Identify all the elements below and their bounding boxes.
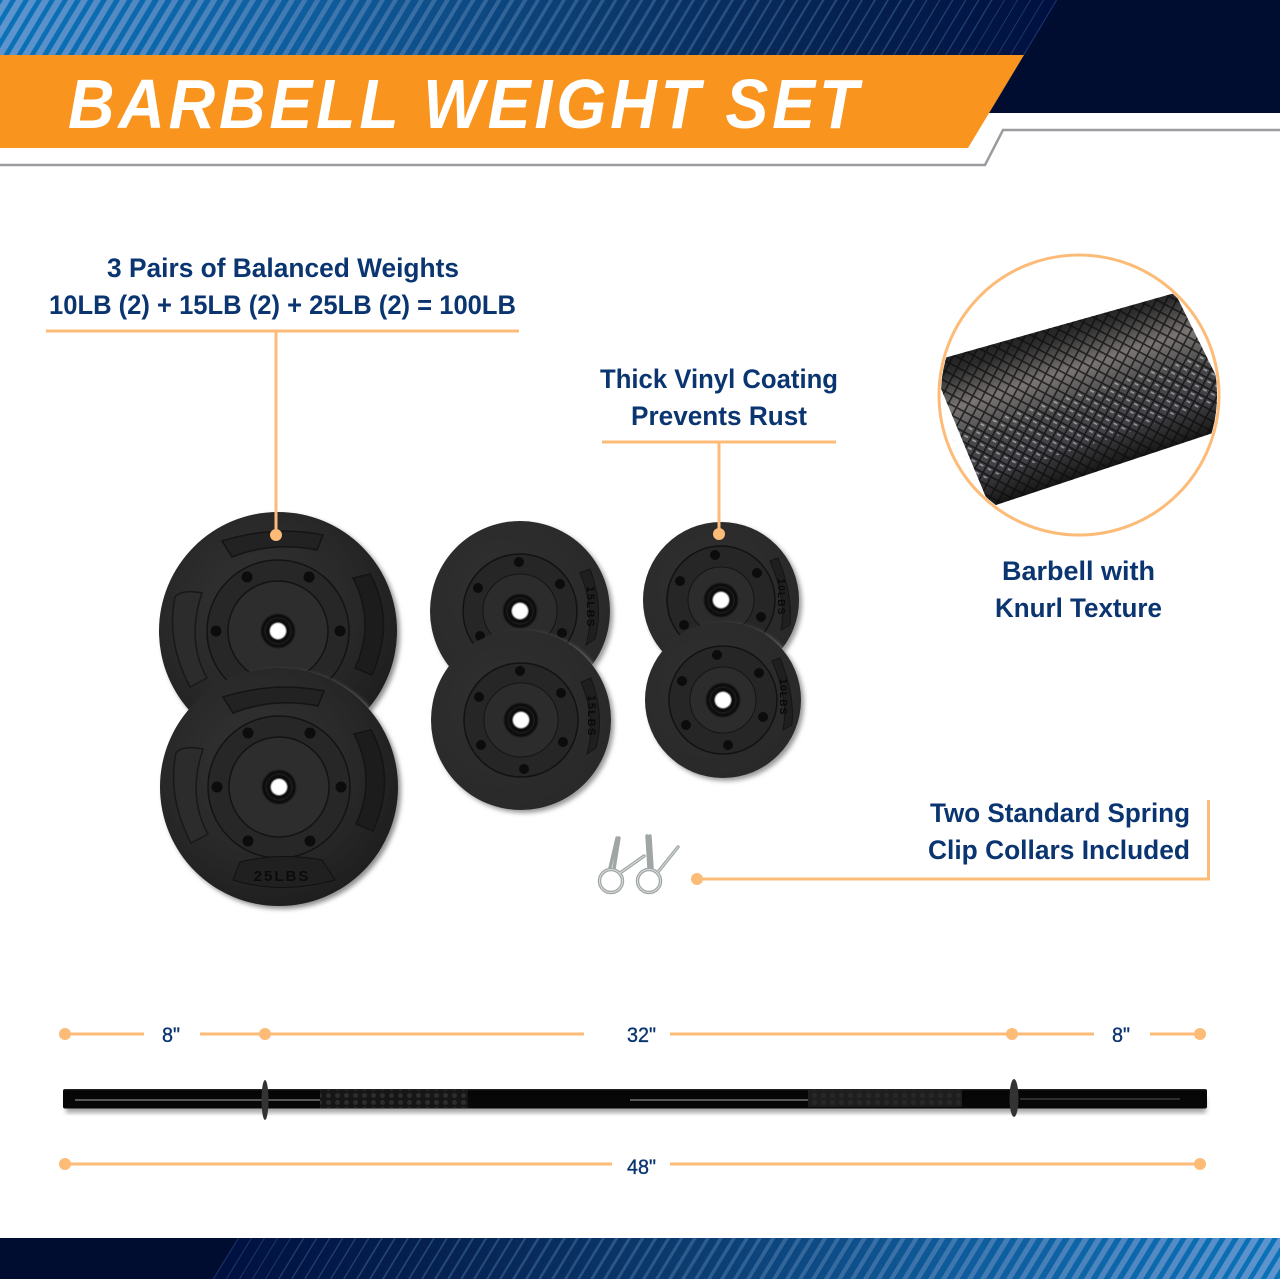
callout: knurl caption: Knurl Texture — [995, 593, 1162, 623]
dimension row: 8 / 32 / 8 inch: 8" — [162, 1024, 180, 1047]
plate: 15 lb back: 15LBS — [584, 586, 596, 628]
callout: vinyl coating — [600, 364, 838, 540]
callout: knurl caption: Barbell with — [1002, 556, 1155, 586]
25 lb plates — [159, 512, 401, 909]
dimension row: 48 inch — [59, 1156, 1206, 1179]
title: BARBELL WEIGHT SET — [68, 66, 863, 144]
plate: 15 lb front — [431, 630, 614, 813]
plate: 15 lb front: 15LBS — [585, 695, 597, 737]
15 lb plates — [430, 521, 614, 813]
barbell — [63, 1079, 1207, 1120]
callout: balanced weights — [46, 253, 519, 541]
callout: vinyl coating: Thick Vinyl Coating — [600, 364, 838, 394]
callout: spring clip collars — [691, 798, 1208, 885]
knurl texture detail circle — [930, 255, 1240, 535]
plate: 10 lb front: 10LBS — [777, 678, 788, 716]
title banner — [0, 55, 1024, 148]
header band — [0, 0, 1280, 113]
plate: 10 lb back: 10LBS — [775, 578, 786, 616]
dimension row: 48 inch: 48" — [627, 1156, 656, 1179]
callout: balanced weights: 3 Pairs of Balanced Weights — [107, 253, 459, 283]
plate: 10 lb front — [645, 622, 804, 781]
callout: balanced weights: 10LB (2) + 15LB (2) + 25LB (2) = 100LB — [49, 290, 516, 320]
dimension row: 8 / 32 / 8 inch — [59, 1024, 1206, 1047]
dimension row: 8 / 32 / 8 inch: 32" — [627, 1024, 656, 1047]
plate: 25 lb back — [159, 512, 400, 753]
10 lb plates — [643, 522, 804, 781]
dimension row: 8 / 32 / 8 inch: 8" — [1112, 1024, 1130, 1047]
callout: spring clip collars: Two Standard Spring — [930, 798, 1190, 828]
header outline — [0, 130, 1280, 165]
plate: 15 lb back — [430, 521, 613, 704]
callout: vinyl coating: Prevents Rust — [631, 401, 807, 431]
plate: 10 lb back — [643, 522, 802, 681]
footer band — [0, 1238, 1280, 1279]
callout: knurl caption — [995, 556, 1162, 623]
callout: spring clip collars: Clip Collars Included — [928, 835, 1190, 865]
plate: 25 lb front: 25LBS — [254, 868, 310, 885]
plate: 25 lb front — [160, 668, 401, 909]
icon: spring clip collars — [600, 836, 678, 892]
